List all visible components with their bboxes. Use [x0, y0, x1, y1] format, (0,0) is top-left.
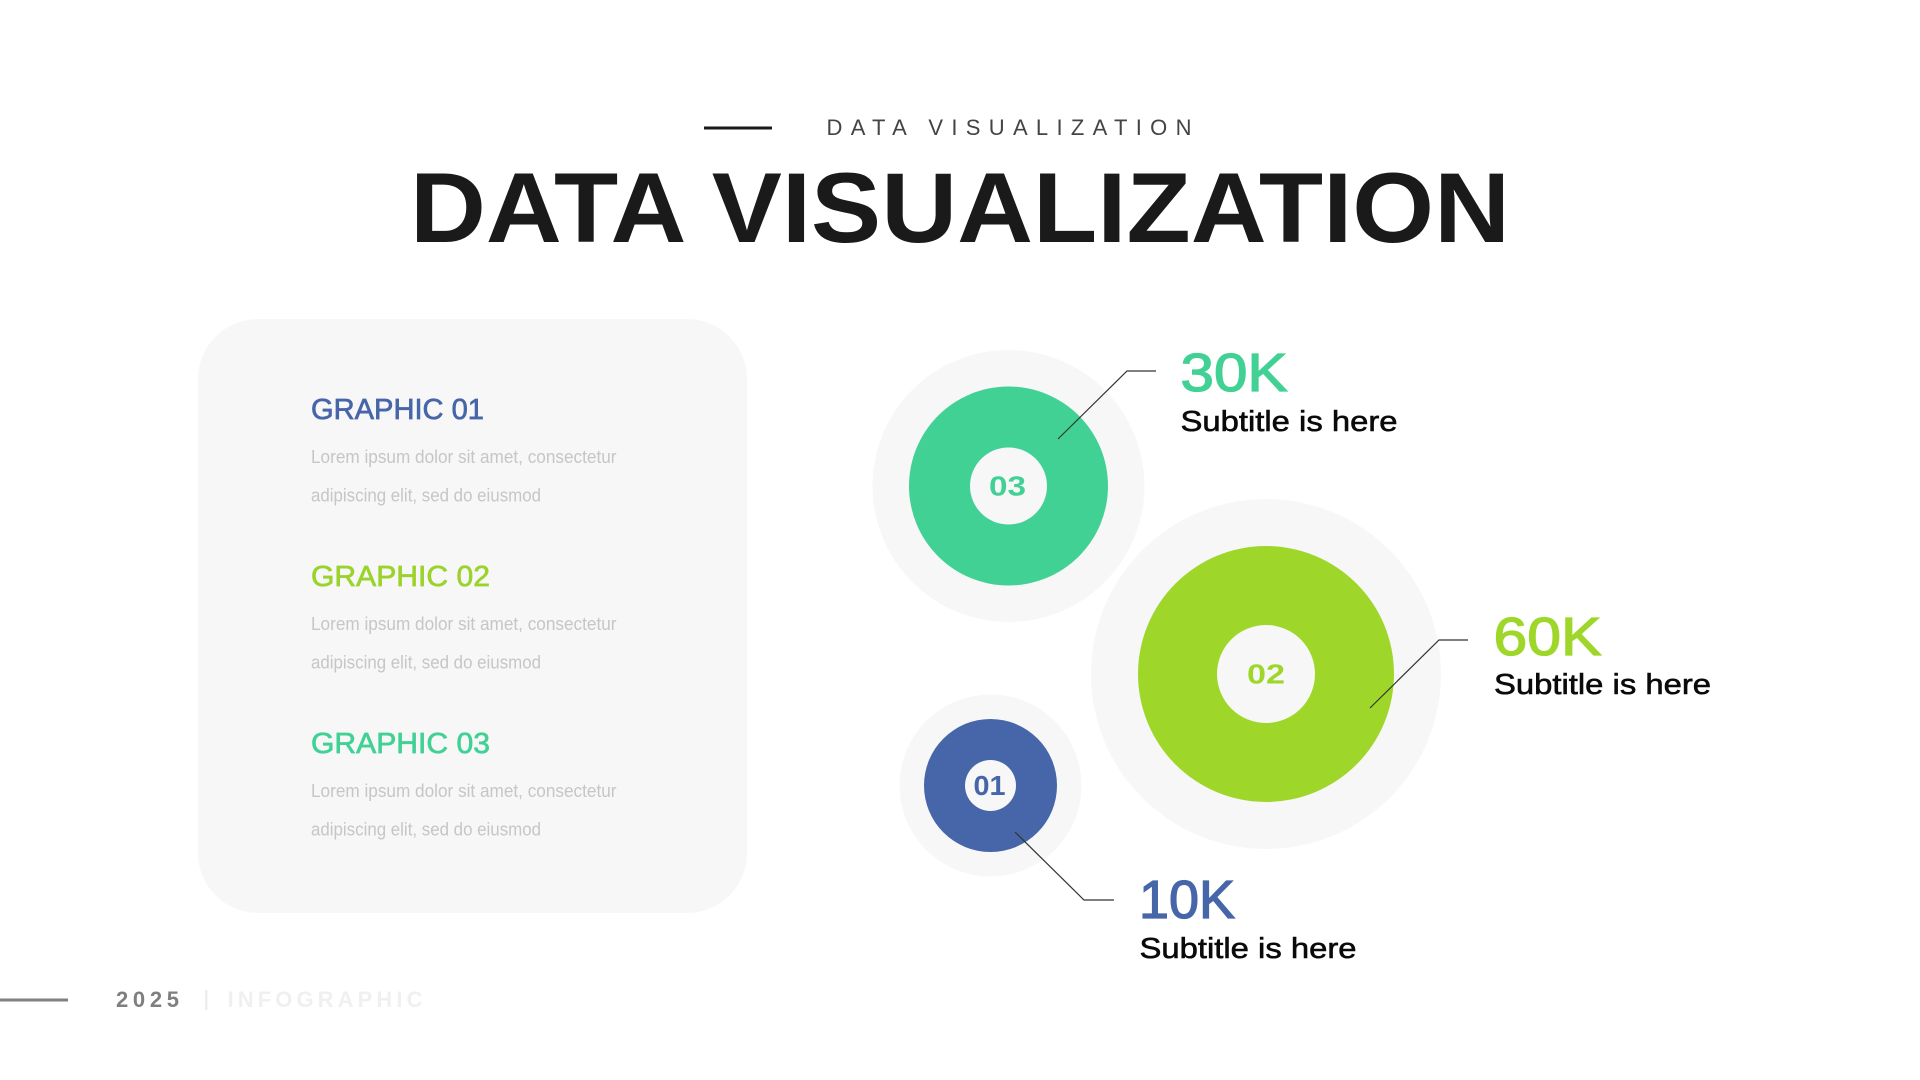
legend item: graphic 01: Lorem ipsum dolor sit amet, consectetur	[311, 446, 616, 467]
callout: 30K: 30K	[1180, 343, 1288, 403]
legend item: graphic 01: GRAPHIC 01	[311, 394, 484, 426]
callout: 60K: Subtitle is here	[1494, 669, 1711, 701]
footer: 2025	[116, 987, 179, 1012]
donut: 01: 01	[974, 770, 1006, 801]
legend item: graphic 03: Lorem ipsum dolor sit amet, consectetur	[311, 780, 616, 801]
donut: 03: 03	[989, 471, 1026, 502]
leader line: 03	[1058, 371, 1156, 439]
title: DATA VISUALIZATION	[410, 152, 1510, 263]
legend item: graphic 03: adipiscing elit, sed do eiusmod	[311, 818, 541, 840]
legend item: graphic 02: adipiscing elit, sed do eiusmod	[311, 652, 541, 672]
footer	[0, 987, 423, 1012]
donut: 03	[872, 350, 1144, 622]
legend item: graphic 01	[311, 394, 616, 506]
legend item: graphic 03	[311, 728, 616, 840]
panel: graphics legend	[198, 319, 747, 913]
callout: 10K: Subtitle is here	[1140, 933, 1356, 965]
leader line: 01	[1015, 832, 1114, 900]
callout: 10K	[1139, 870, 1356, 965]
callout: 60K: 60K	[1494, 607, 1602, 667]
callout: 30K: Subtitle is here	[1180, 406, 1398, 438]
donut: 02: 02	[1247, 659, 1285, 690]
eyebrow heading with rule: DATA VISUALIZATION	[826, 115, 1192, 140]
footer: INFOGRAPHIC	[228, 987, 423, 1012]
legend item: graphic 02: GRAPHIC 02	[311, 561, 490, 593]
donut: 02	[1091, 499, 1441, 849]
legend item: graphic 02: Lorem ipsum dolor sit amet, consectetur	[311, 613, 616, 634]
legend item: graphic 03: GRAPHIC 03	[311, 728, 490, 760]
callout: 10K: 10K	[1139, 870, 1235, 930]
callout: 30K	[1180, 343, 1398, 438]
legend item: graphic 01: adipiscing elit, sed do eiusmod	[311, 484, 541, 506]
legend item: graphic 02	[311, 561, 616, 672]
callout: 60K	[1494, 607, 1711, 701]
donut: 01	[900, 694, 1082, 876]
leader line: 02	[1370, 640, 1468, 708]
